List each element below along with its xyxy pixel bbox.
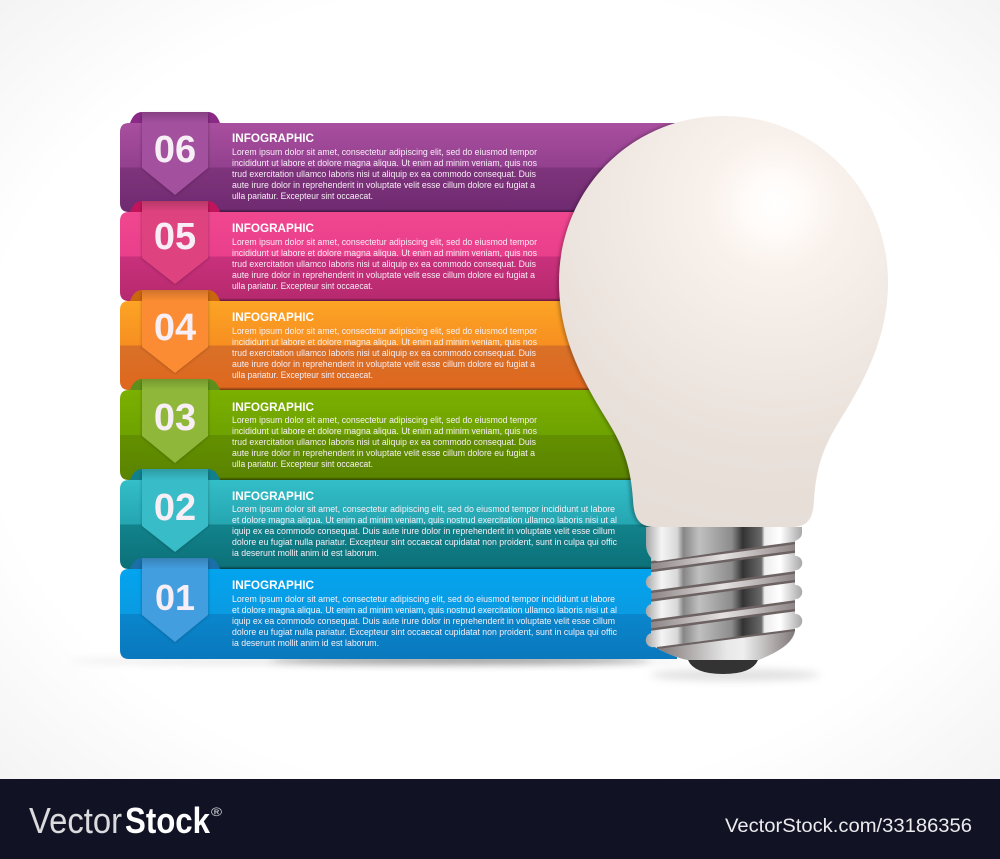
ribbon tab 01 — [130, 558, 220, 642]
logo: ® — [211, 805, 222, 819]
ribbon tab 05 — [130, 201, 220, 284]
body text 05: aute irure dolor in reprehenderit in voluptate velit esse cillum dolore eu fugiat a — [232, 270, 535, 280]
band 01 — [120, 569, 677, 659]
body text 04: Lorem ipsum dolor sit amet, consectetur adipiscing elit, sed do eiusmod tempor — [232, 326, 537, 336]
body text 04: incididunt ut labore et dolore magna aliqua. Ut enim ad minim veniam, quis nos — [232, 337, 538, 347]
number 04: 04 — [154, 307, 196, 349]
ground shadow — [70, 656, 820, 681]
panel: step 01 — [120, 558, 677, 659]
number 05: 05 — [154, 216, 196, 258]
body text 03: incididunt ut labore et dolore magna aliqua. Ut enim ad minim veniam, quis nos — [232, 426, 538, 436]
ribbon tab 06 — [130, 112, 220, 195]
logo: Vector — [29, 800, 122, 841]
number 01: 01 — [155, 577, 195, 618]
heading 06: INFOGRAPHIC — [232, 131, 314, 145]
body text 06: trud exercitation ullamco laboris nisi ut aliquip ex ea commodo consequat. Duis — [232, 169, 537, 179]
number 03: 03 — [154, 397, 196, 439]
logo: Stock — [125, 800, 211, 841]
band 02 — [120, 480, 700, 569]
ribbon tab 04 — [130, 290, 220, 373]
body text 03 — [232, 415, 538, 469]
light bulb — [558, 116, 888, 674]
footer bar — [0, 779, 1000, 859]
number 06: 06 — [154, 129, 196, 171]
body text 06: ulla pariatur. Excepteur sint occaecat. — [232, 191, 373, 201]
body text 05: incididunt ut labore et dolore magna aliqua. Ut enim ad minim veniam, quis nos — [232, 248, 538, 258]
heading 03: INFOGRAPHIC — [232, 400, 314, 414]
body text 05 — [232, 237, 538, 291]
band 04 — [120, 301, 700, 390]
body text 03: ulla pariatur. Excepteur sint occaecat. — [232, 459, 373, 469]
body text 02: Lorem ipsum dolor sit amet, consectetur adipiscing elit, sed do eiusmod tempor incididunt ut labore — [232, 504, 615, 514]
heading 05: INFOGRAPHIC — [232, 221, 314, 235]
body text 06: aute irure dolor in reprehenderit in voluptate velit esse cillum dolore eu fugiat a — [232, 180, 535, 190]
body text 04: aute irure dolor in reprehenderit in voluptate velit esse cillum dolore eu fugiat a — [232, 359, 535, 369]
body text 04: trud exercitation ullamco laboris nisi ut aliquip ex ea commodo consequat. Duis — [232, 348, 537, 358]
heading 04: INFOGRAPHIC — [232, 310, 314, 324]
body text 05: trud exercitation ullamco laboris nisi ut aliquip ex ea commodo consequat. Duis — [232, 259, 537, 269]
bulb shadow — [556, 123, 675, 527]
body text 02 — [232, 504, 618, 558]
body text 03: trud exercitation ullamco laboris nisi ut aliquip ex ea commodo consequat. Duis — [232, 437, 537, 447]
body text 01: dolore eu fugiat nulla pariatur. Excepteur sint occaecat cupidatat non proident, sunt in culpa qui offic — [232, 627, 618, 637]
body text 04: ulla pariatur. Excepteur sint occaecat. — [232, 370, 373, 380]
body text 01 — [232, 594, 618, 648]
bulb contact — [688, 660, 758, 674]
body text 01: Lorem ipsum dolor sit amet, consectetur adipiscing elit, sed do eiusmod tempor incididunt ut labore — [232, 594, 615, 604]
panel: step 04 — [120, 290, 700, 390]
body text 02: ia deserunt mollit anim id est laborum. — [232, 548, 379, 558]
body text 01: iquip ex ea commodo consequat. Duis aute irure dolor in reprehenderit in voluptate velit esse cillum — [232, 616, 615, 626]
ribbon tab 02 — [130, 469, 220, 552]
body text 06: Lorem ipsum dolor sit amet, consectetur adipiscing elit, sed do eiusmod tempor — [232, 147, 537, 157]
band 03 — [120, 390, 700, 480]
body text 01: ia deserunt mollit anim id est laborum. — [232, 638, 379, 648]
panel: step 05 — [120, 201, 700, 301]
ribbon tab 03 — [130, 379, 220, 463]
panel: step 03 — [120, 379, 700, 480]
body text 05: Lorem ipsum dolor sit amet, consectetur adipiscing elit, sed do eiusmod tempor — [232, 237, 537, 247]
heading 02: INFOGRAPHIC — [232, 489, 314, 503]
body text 05: ulla pariatur. Excepteur sint occaecat. — [232, 281, 373, 291]
body text 06: incididunt ut labore et dolore magna aliqua. Ut enim ad minim veniam, quis nos — [232, 158, 538, 168]
body text 01: et dolore magna aliqua. Ut enim ad minim veniam, quis nostrud exercitation ullamco laboris nisi ut al — [232, 605, 617, 615]
image id: VectorStock.com/33186356 — [725, 816, 972, 837]
band 05 — [120, 212, 700, 301]
body text 03: Lorem ipsum dolor sit amet, consectetur adipiscing elit, sed do eiusmod tempor — [232, 415, 537, 425]
heading 01: INFOGRAPHIC — [232, 578, 314, 592]
body text 02: et dolore magna aliqua. Ut enim ad minim veniam, quis nostrud exercitation ullamco laboris nisi ut al — [232, 515, 617, 525]
body text 03: aute irure dolor in reprehenderit in voluptate velit esse cillum dolore eu fugiat a — [232, 448, 535, 458]
body text 04 — [232, 326, 538, 380]
body text 06 — [232, 147, 538, 201]
panel: step 06 — [120, 112, 700, 212]
logo — [29, 800, 222, 841]
screw base — [645, 527, 802, 660]
panel: step 02 — [120, 469, 700, 569]
body text 02: dolore eu fugiat nulla pariatur. Excepteur sint occaecat cupidatat non proident, sunt in culpa qui offic — [232, 537, 618, 547]
number 02: 02 — [154, 487, 196, 529]
bulb glass — [559, 116, 888, 527]
body text 02: iquip ex ea commodo consequat. Duis aute irure dolor in reprehenderit in voluptate velit esse cillum — [232, 526, 615, 536]
band 06 — [120, 123, 700, 212]
